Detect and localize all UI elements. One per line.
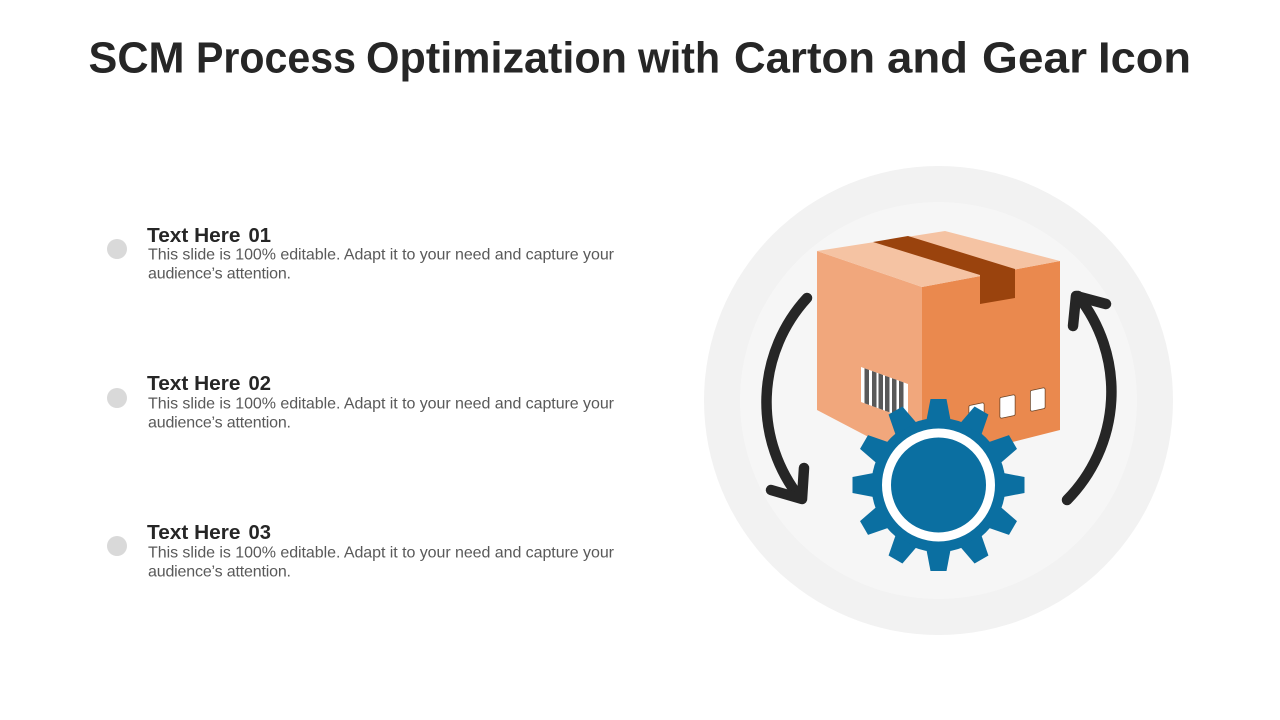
heading 3: 03: [248, 522, 271, 544]
inner circle: [740, 202, 1137, 599]
outer circle: [704, 166, 1173, 635]
heading 3: Text Here: [147, 522, 240, 544]
arrow: left, pointing down: [766, 298, 807, 499]
heading 1: 01: [248, 225, 271, 247]
icon: carton box: [817, 231, 1060, 465]
bullet 2: [107, 388, 127, 408]
carton handling marks: [970, 390, 1044, 424]
list item 2: [107, 373, 615, 432]
description 1: This slide is 100% editable. Adapt it to your need and capture your: [148, 246, 615, 264]
heading 2: Text Here: [147, 373, 240, 395]
list item 1: [107, 225, 615, 282]
description 3: audience’s attention.: [148, 564, 291, 580]
heading 1: Text Here: [147, 225, 240, 247]
description 1: audience’s attention.: [148, 266, 291, 282]
icon: gear: [852, 399, 1024, 571]
title: Process: [196, 34, 356, 82]
title: SCM: [88, 34, 184, 82]
description 2: audience’s attention.: [148, 414, 291, 432]
list item 3: [107, 522, 615, 580]
title: with: [637, 34, 720, 82]
title: Gear: [982, 34, 1087, 82]
carton right face: [922, 261, 1060, 465]
illustration: carton and gear in circles: [704, 166, 1173, 635]
bullet 1: [107, 239, 127, 259]
carton tape: [873, 236, 1015, 304]
description 2: This slide is 100% editable. Adapt it to your need and capture your: [148, 396, 615, 412]
arrow: right, pointing up: [1067, 296, 1111, 500]
heading 2: 02: [248, 373, 271, 395]
description 3: This slide is 100% editable. Adapt it to your need and capture your: [148, 544, 615, 562]
title: Optimization: [366, 34, 627, 82]
carton left face: [817, 251, 922, 465]
title: and: [887, 34, 968, 82]
title: Icon: [1098, 34, 1191, 82]
barcode: [861, 367, 908, 419]
title: Carton: [734, 34, 875, 82]
bullet 3: [107, 536, 127, 556]
carton top face: [817, 231, 1060, 287]
